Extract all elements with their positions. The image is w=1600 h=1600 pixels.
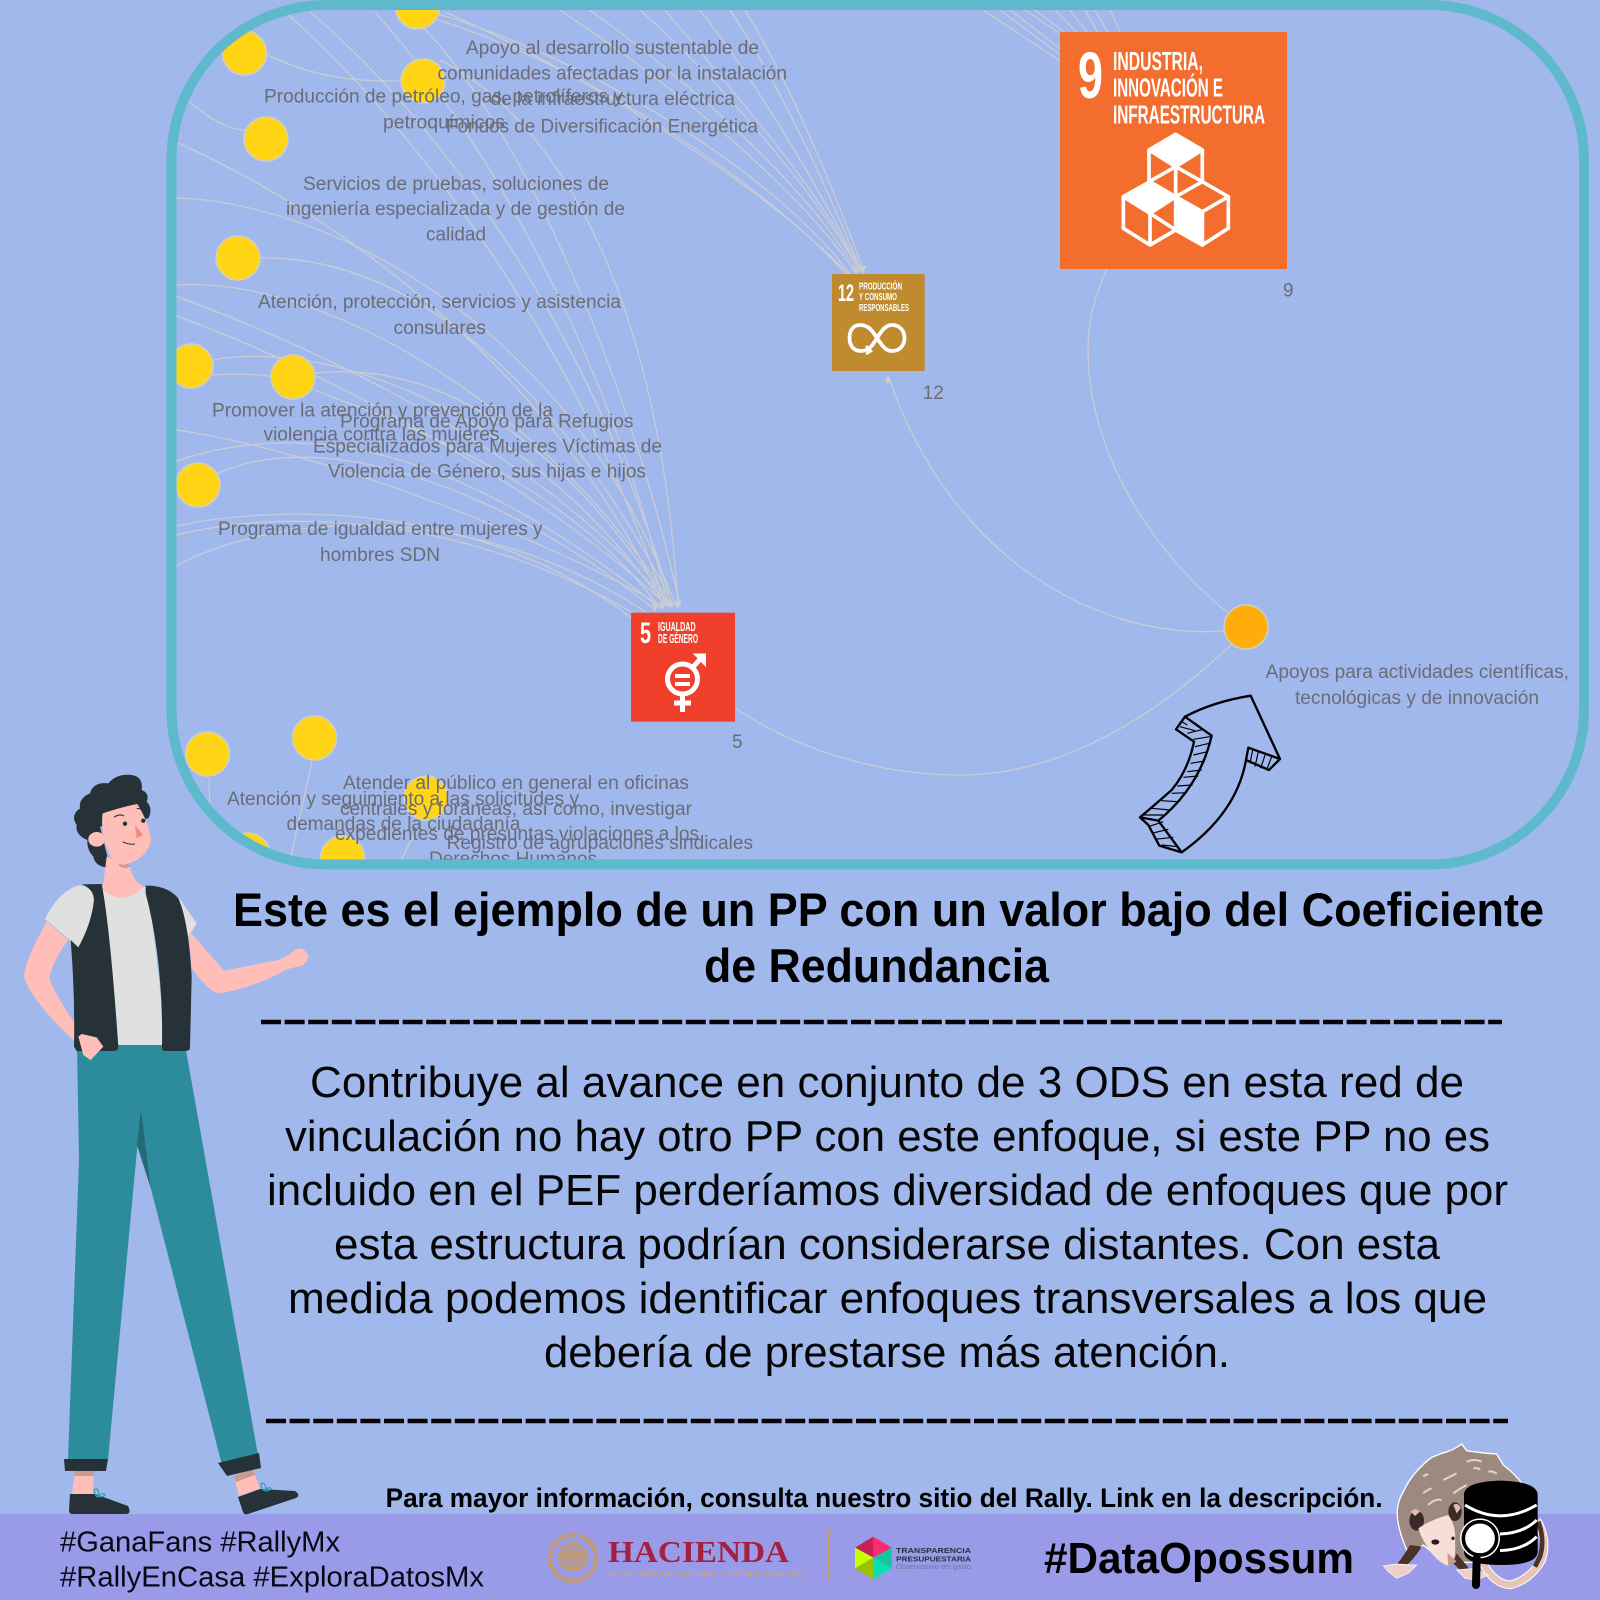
node labels: Servicios de pruebas, soluciones de	[303, 174, 609, 195]
node labels: expedientes de presuntas violaciones a los	[335, 824, 699, 845]
logo: Hacienda: HACIENDA	[608, 1534, 790, 1569]
tile: ODS 12: 12	[838, 280, 854, 307]
tile: ODS 12	[832, 274, 925, 371]
logo: Transparencia Presupuestaria: TRANSPARENCIA	[896, 1546, 972, 1555]
more information note: Para mayor información, consulta nuestro sitio del Rally. Link en la descripción.	[386, 1483, 1383, 1513]
yellow program nodes	[169, 0, 448, 880]
node labels: Producción de petróleo, gas, petrolíferos y	[264, 87, 624, 108]
node labels: ingeniería especializada y de gestión de	[286, 199, 625, 220]
node labels: Atender al público en general en oficinas	[343, 773, 689, 794]
tile: ODS 5: 5	[640, 617, 651, 650]
node labels: de la infraestructura eléctrica	[491, 89, 735, 110]
logo: Hacienda: SECRETARÍA DE HACIENDA Y CRÉDITO PÚBLICO	[608, 1569, 802, 1578]
hand-drawn arrow	[1140, 696, 1280, 852]
node labels: Programa de igualdad entre mujeres y	[218, 519, 543, 540]
node labels: Derechos Humanos	[429, 849, 597, 870]
node labels: consulares	[394, 318, 486, 339]
title: de Redundancia	[704, 939, 1050, 992]
arrowheads	[652, 265, 892, 612]
tile: ODS 9: INNOVACIÓN E	[1113, 73, 1223, 103]
ears	[1409, 1511, 1424, 1531]
tile: ODS 9: INDUSTRIA,	[1113, 46, 1203, 76]
body text: medida podemos identificar enfoques transversales a los que	[288, 1274, 1487, 1323]
tile: ODS 12: PRODUCCIÓN	[859, 279, 902, 292]
orange program node	[1224, 605, 1268, 649]
body text: vinculación no hay otro PP con este enfoque, si este PP no es	[285, 1112, 1490, 1161]
cuffs and feet	[64, 1453, 298, 1514]
body text: esta estructura podrían considerarse distantes. Con esta	[334, 1220, 1441, 1269]
node labels: violencia contra las mujeres	[264, 425, 500, 446]
title	[233, 883, 1544, 992]
node labels: comunidades afectadas por la instalación	[438, 63, 787, 84]
logo: Transparencia Presupuestaria: Observatorio del gasto	[896, 1564, 971, 1571]
upper body	[24, 775, 308, 1060]
icon: cubes	[1123, 134, 1228, 245]
node labels: calidad	[426, 225, 486, 246]
body text: debería de prestarse más atención.	[544, 1328, 1230, 1377]
campaign hashtag: #DataOpossum	[1044, 1534, 1354, 1583]
node labels: hombres SDN	[320, 545, 440, 566]
face	[1418, 1515, 1455, 1566]
node labels: Promover la atención y prevención de la	[212, 401, 553, 422]
tile: ODS 9: INFRAESTRUCTURA	[1113, 99, 1265, 129]
node labels: centrales y foráneas, así como, investigar	[340, 799, 693, 820]
panel: network graph	[169, 0, 1584, 880]
node labels: 5	[732, 732, 743, 753]
mascot: opossum with database	[1383, 1444, 1544, 1585]
node labels: demandas de la ciudadanía	[286, 814, 521, 835]
tile: ODS 9	[1060, 32, 1287, 269]
body text	[267, 1058, 1508, 1377]
node labels: Apoyo al desarrollo sustentable de	[466, 38, 759, 59]
node labels: Apoyos para actividades científicas,	[1266, 662, 1569, 683]
icon: magnifier	[1460, 1518, 1500, 1558]
panel border	[172, 5, 1584, 864]
logo: Hacienda	[550, 1534, 802, 1581]
hashtags	[60, 1527, 485, 1594]
logo: Transparencia Presupuestaria: PRESUPUESTARIA	[896, 1554, 972, 1564]
node labels: tecnológicas y de innovación	[1295, 688, 1539, 709]
node labels: 12	[923, 383, 944, 404]
footer band	[0, 1514, 1600, 1600]
tile: ODS 9: 9	[1078, 38, 1103, 112]
tile: ODS 12: Y CONSUMO	[859, 291, 897, 303]
trousers	[68, 1045, 258, 1465]
icon: national emblem	[550, 1535, 596, 1581]
node labels: Programa de Apoyo para Refugios	[340, 412, 634, 433]
body text: Contribuye al avance en conjunto de 3 ODS en esta red de	[310, 1058, 1464, 1107]
node labels: petroquímicos	[383, 113, 505, 134]
hashtags: #RallyEnCasa #ExploraDatosMx	[60, 1562, 485, 1594]
tile: ODS 5: DE GÉNERO	[658, 631, 698, 646]
icon: gender equality	[668, 654, 706, 712]
paws	[1383, 1564, 1488, 1580]
node labels: Registro de agrupaciones sindicales	[447, 833, 753, 854]
node labels: Atención, protección, servicios y asistencia	[258, 292, 621, 313]
tile: ODS 5: IGUALDAD	[658, 620, 696, 634]
logo: Transparencia Presupuestaria	[855, 1537, 972, 1579]
tile: ODS 12: RESPONSABLES	[859, 302, 909, 314]
node labels: Especializados para Mujeres Víctimas de	[313, 437, 662, 458]
body text: incluido en el PEF perderíamos diversidad de enfoques que por	[267, 1166, 1508, 1215]
icon: hexagon	[855, 1537, 892, 1579]
title: Este es el ejemplo de un PP con un valor bajo del Coeficiente	[233, 883, 1544, 936]
legs	[1395, 1545, 1472, 1575]
fur	[1397, 1444, 1537, 1563]
node labels	[212, 38, 1569, 870]
node labels: Violencia de Género, sus hijas e hijos	[328, 462, 646, 483]
tile: ODS 5	[631, 613, 735, 722]
node labels: Atención y seguimiento a las solicitudes y	[227, 789, 579, 810]
node labels: 9	[1283, 281, 1294, 302]
hashtags: #GanaFans #RallyMx	[60, 1527, 341, 1559]
icon: infinity	[850, 325, 904, 354]
character: man in vest	[24, 775, 308, 1514]
network edges	[176, 10, 1232, 862]
node labels: Fondos de Diversificación Energética	[446, 117, 758, 138]
icon: database	[1464, 1481, 1538, 1565]
tail	[1483, 1520, 1544, 1585]
